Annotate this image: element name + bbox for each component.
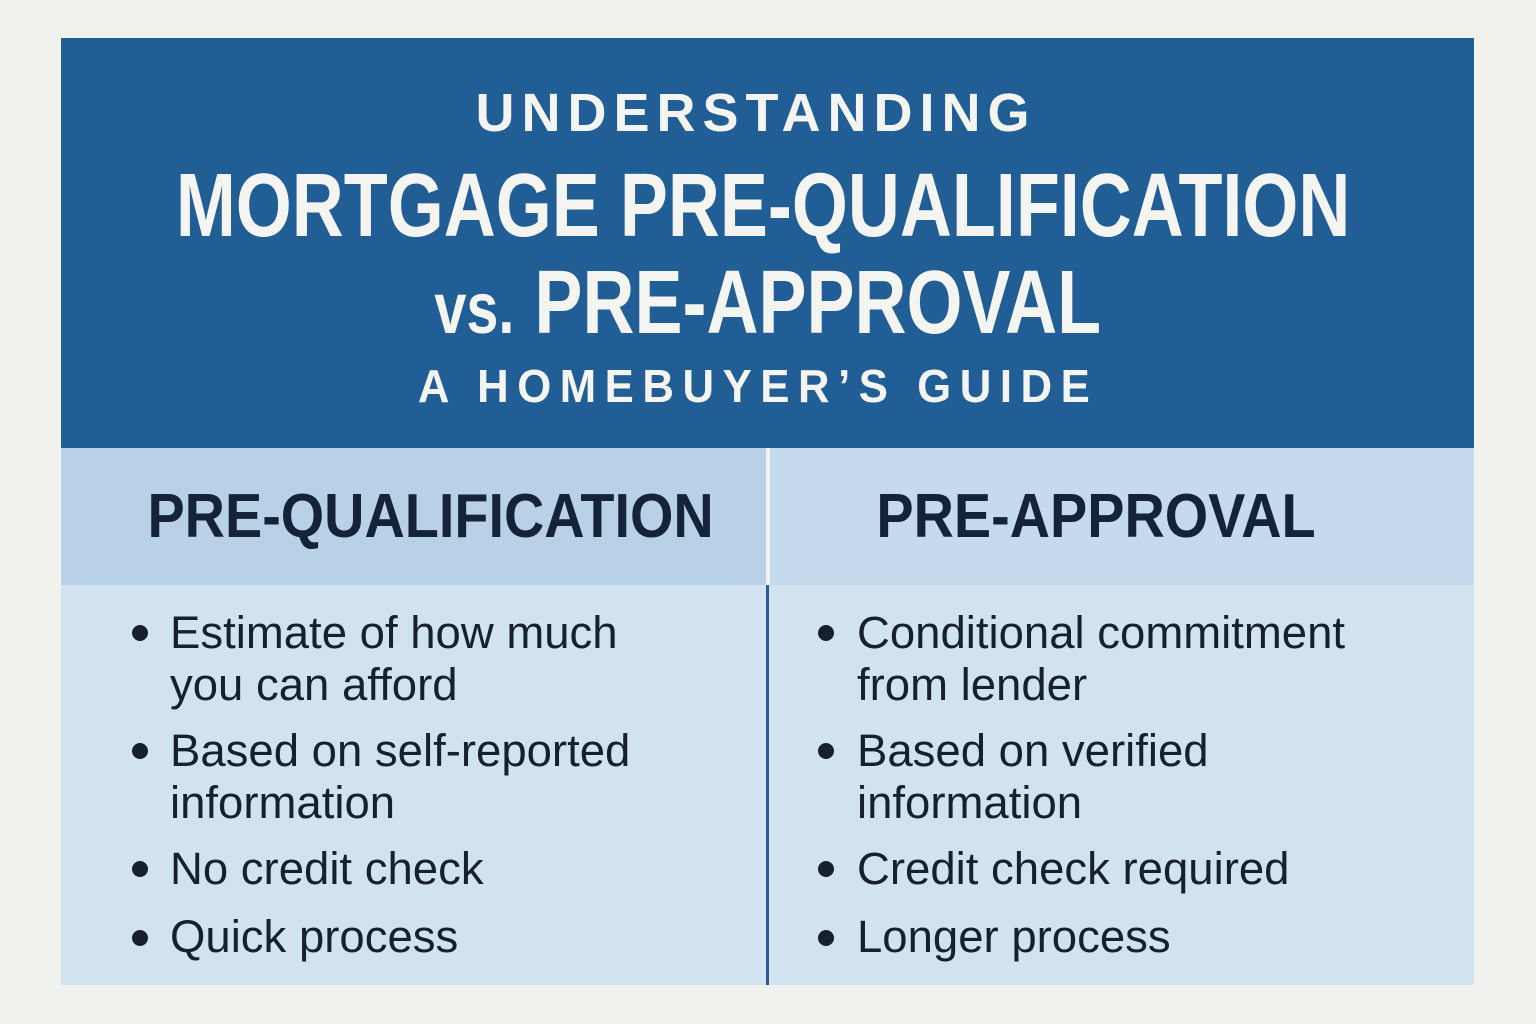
panel: pre-qualification header <box>61 448 766 585</box>
panel: pre-qualification header: PRE-QUALIFICATION <box>147 482 714 551</box>
divider <box>766 585 769 985</box>
title: vs line: vs. PRE-APPROVAL <box>435 253 1101 353</box>
list: pre-approval: Based on verified <box>857 725 1209 776</box>
list: pre-approval: Longer process <box>857 911 1171 962</box>
list: pre-qualification: Estimate of how much <box>170 607 618 658</box>
subtitle: A HOMEBUYER’S GUIDE <box>418 360 1098 412</box>
title: main line: MORTGAGE PRE-QUALIFICATION <box>176 156 1350 256</box>
list: pre-approval: Conditional commitment <box>857 607 1345 658</box>
list: pre-approval: from lender <box>857 659 1087 710</box>
list: pre-approval: information <box>857 777 1082 828</box>
list: pre-qualification: Quick process <box>170 911 458 962</box>
panel: pre-approval header: PRE-APPROVAL <box>876 482 1316 551</box>
list: pre-approval <box>818 607 1345 962</box>
list: pre-qualification: information <box>170 777 395 828</box>
title: understanding: UNDERSTANDING <box>476 83 1036 143</box>
list: pre-qualification <box>132 607 630 962</box>
list: pre-qualification: Based on self-reported <box>170 725 630 776</box>
panel: pre-approval header <box>770 448 1474 585</box>
panel: body <box>61 585 1474 985</box>
list: pre-qualification: No credit check <box>170 843 484 894</box>
banner <box>61 38 1474 448</box>
list: pre-qualification: you can afford <box>170 659 458 710</box>
list: pre-approval: Credit check required <box>857 843 1289 894</box>
